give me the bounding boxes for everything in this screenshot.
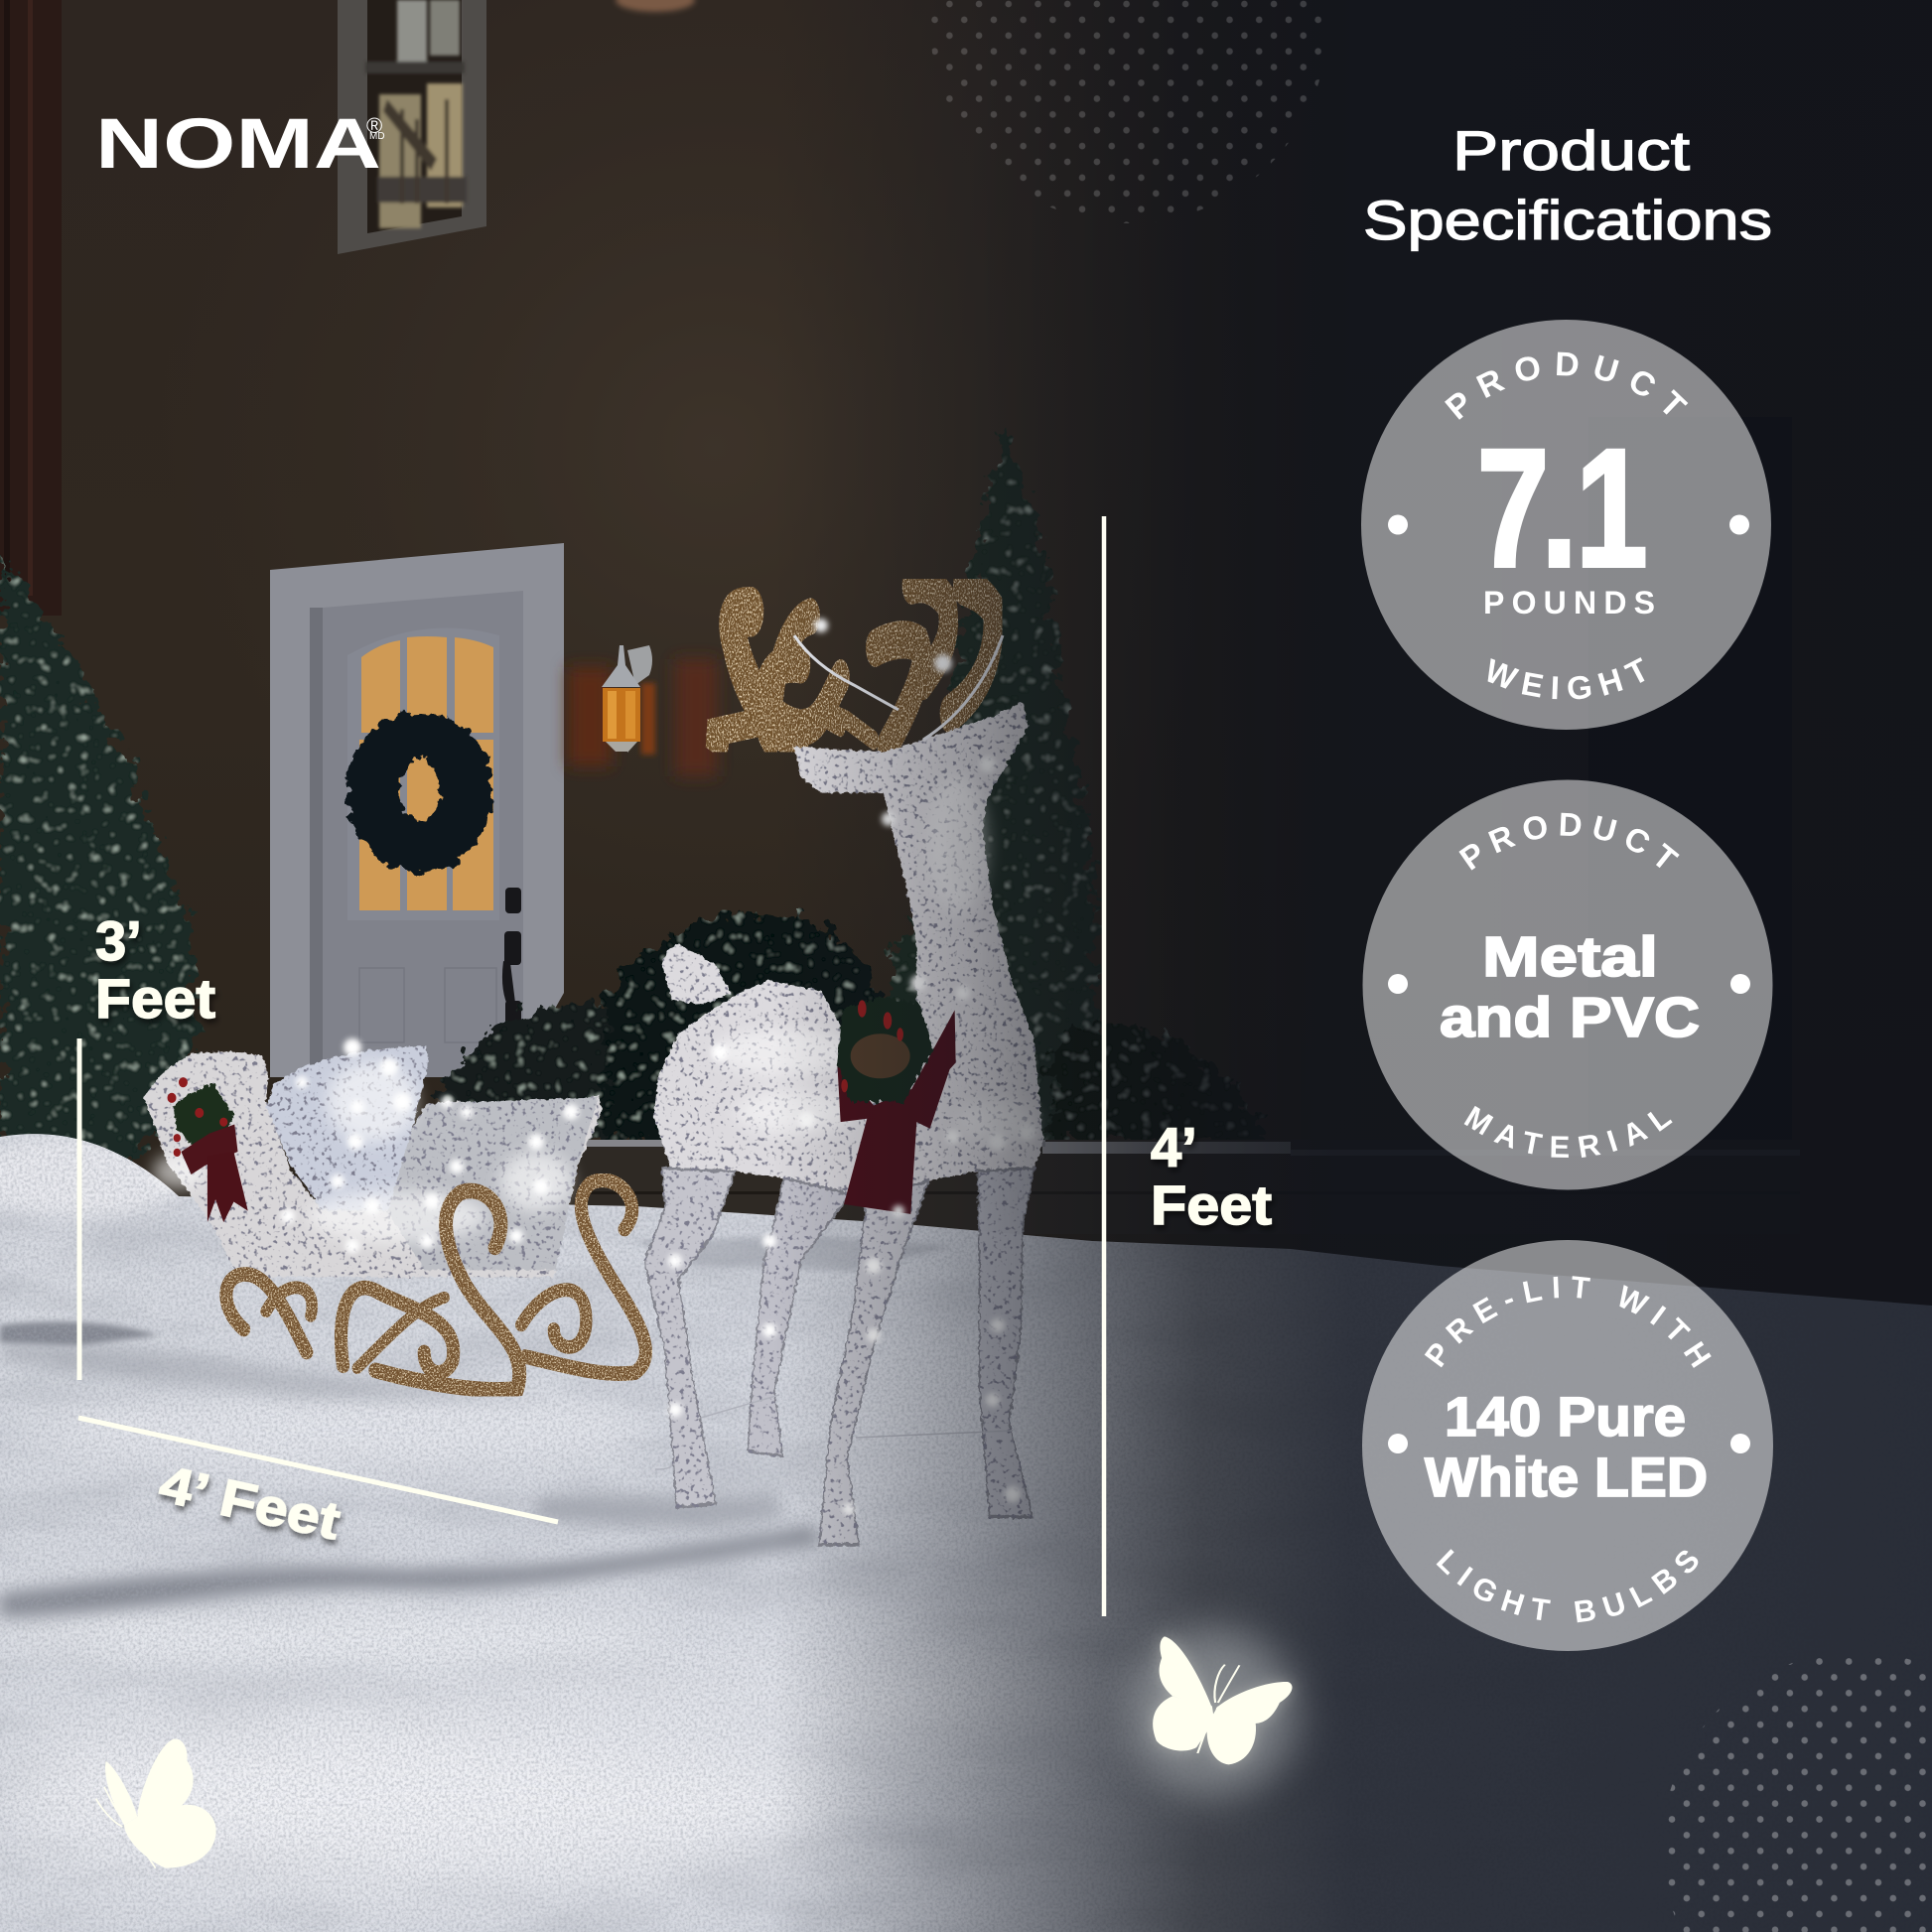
reindeer wire ties xyxy=(655,1395,1013,1469)
title: product specifications xyxy=(1363,119,1772,251)
badge: material xyxy=(1362,780,1773,1189)
reindeer chest bow and greenery xyxy=(837,997,956,1214)
snow ground xyxy=(0,1122,1932,1932)
dimension line: sleigh height xyxy=(77,1038,81,1380)
halftone dots bottom right xyxy=(1658,1648,1932,1932)
glow behind right butterfly xyxy=(1129,1628,1298,1797)
reindeer xyxy=(644,584,1043,1545)
NOMA logo: NOMA xyxy=(95,105,381,184)
curved label: material: MATERIAL xyxy=(1463,1106,1673,1158)
LED light sparkles xyxy=(281,619,1035,1515)
sleigh body and seats xyxy=(144,1046,603,1277)
curved label: product: PRODUCT xyxy=(1445,351,1688,420)
sleigh bow with berries xyxy=(168,1077,248,1222)
icon: butterfly bottom left xyxy=(96,1739,216,1868)
title: product specifications: Specifications xyxy=(1363,189,1772,251)
curved label: pre-lit with: PRE-LIT WITH xyxy=(1424,1276,1712,1368)
shrubs by the door xyxy=(437,912,1271,1142)
reindeer body xyxy=(644,702,1043,1545)
NOMA logo: MD xyxy=(369,131,385,142)
weight value: 1 xyxy=(1576,413,1648,602)
sleigh soft light glow xyxy=(153,1062,572,1242)
reindeer soft light glow xyxy=(715,774,1037,1144)
wall lamp with orange glow xyxy=(568,645,717,776)
halftone dots top xyxy=(923,0,1330,228)
snow shadow bands xyxy=(0,1236,953,1616)
dimension label: 4 feet height: 4’ xyxy=(1151,1116,1197,1178)
sleigh gold runners xyxy=(226,1180,645,1390)
LED value: White LED xyxy=(1425,1446,1708,1508)
material value: Metal xyxy=(1482,925,1658,989)
front door with trim xyxy=(270,543,564,1077)
reindeer antler light wire xyxy=(794,635,1003,740)
LED value: 140 Pure xyxy=(1445,1385,1686,1448)
extra darkening above the snow line xyxy=(894,0,1932,1306)
badge: LED bulbs xyxy=(1362,1240,1773,1651)
title: product specifications: Product xyxy=(1452,119,1691,182)
curved label: light bulbs: LIGHT BULBS xyxy=(1436,1549,1698,1622)
dimension label: 4 feet height: Feet xyxy=(1151,1173,1272,1236)
stone ledge xyxy=(579,1140,1800,1234)
curved label: weight: WEIGHT xyxy=(1487,657,1644,699)
dimension line: sleigh length xyxy=(78,1418,558,1522)
door wreath xyxy=(347,713,492,872)
sleigh xyxy=(144,1046,645,1390)
material value: and PVC xyxy=(1440,986,1700,1049)
evergreen tree on left xyxy=(0,556,199,1181)
NOMA logo: ® xyxy=(366,113,382,138)
upstairs window xyxy=(338,0,486,254)
weight value: 7 xyxy=(1477,413,1549,602)
door handle xyxy=(502,888,521,1025)
weight unit: POUNDS xyxy=(1483,585,1655,621)
badge: weight xyxy=(1361,320,1771,730)
dimension label: 4 feet length: 4’ Feet xyxy=(154,1455,345,1551)
curved label: product: PRODUCT xyxy=(1459,812,1680,870)
reindeer antlers xyxy=(708,584,994,747)
dimension label: 3 feet: Feet xyxy=(95,967,215,1030)
evergreen tree behind reindeer xyxy=(874,427,1102,1142)
weight value: . xyxy=(1542,413,1578,602)
icon: glowing butterfly right xyxy=(1153,1636,1293,1764)
dimension label: 3 feet: 3’ xyxy=(95,909,142,972)
dimension line: reindeer height xyxy=(1102,516,1106,1616)
door glass panes xyxy=(359,636,493,910)
distant dark doorway on right xyxy=(1588,417,1792,1157)
